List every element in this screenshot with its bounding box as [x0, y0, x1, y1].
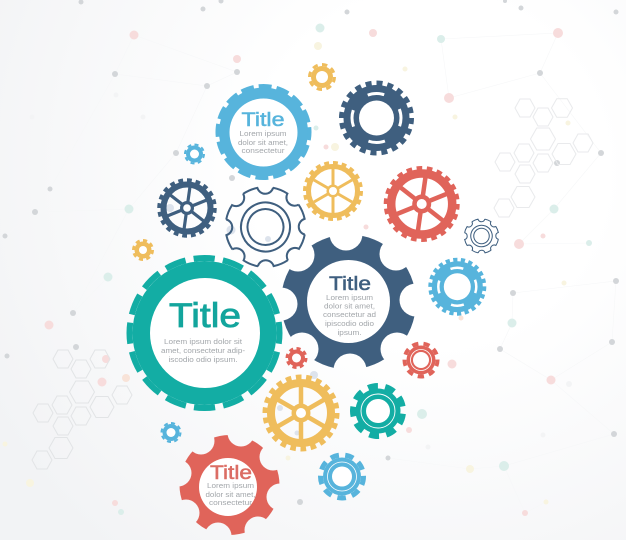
text: light blue gear body: consectetur [242, 146, 285, 155]
text: navy gear body: Lorem ipsum [326, 293, 373, 302]
text: teal gear body: Lorem ipsum dolor sit [164, 337, 242, 346]
text: navy gear body: ipsum. [338, 328, 362, 337]
gear: small red ringed [404, 344, 438, 376]
gear: small outline [457, 211, 506, 261]
hexagon cluster: left [32, 350, 132, 469]
text: light blue gear body: dolor sit amet, [238, 138, 288, 147]
text: light blue gear body: Lorem ipsum [240, 129, 286, 138]
gear: red title gear [180, 435, 280, 535]
text: teal gear body [161, 337, 246, 364]
gear: tiny blue lower [162, 423, 180, 442]
gear: navy title gear [281, 234, 416, 370]
text: teal gear body: iscodio odio ipsum. [168, 355, 238, 364]
text: red gear body [206, 481, 256, 507]
gear: navy outline [208, 170, 323, 284]
text: red gear body: dolor sit amet, [206, 490, 256, 499]
gear: teal title gear [120, 248, 289, 418]
gear: tiny blue [185, 144, 204, 164]
gear: red spoked [386, 168, 457, 240]
gear: light blue title gear [213, 81, 314, 183]
heading: light blue title: Title [242, 110, 284, 131]
text: navy gear body: dolor sit amet, [324, 302, 375, 310]
text: light blue gear body [238, 129, 288, 155]
gear: tiny yellow left [134, 240, 152, 260]
gear: yellow spoked lower [266, 378, 336, 448]
gear: navy slotted [342, 83, 412, 153]
heading: teal title: Title [169, 297, 241, 335]
text: teal gear body: amet, consectetur adip- [161, 346, 246, 355]
text: red gear body: consectetur [209, 498, 253, 507]
gear: teal ringed [350, 383, 406, 439]
gear: blue ringed [320, 455, 364, 498]
gear: navy spoked [160, 180, 214, 236]
hexagon cluster: right [494, 99, 593, 217]
gear: blue slotted [430, 260, 484, 314]
text: navy gear body: consectetur ad [323, 310, 376, 319]
text: red gear body: Lorem ipsum [207, 481, 254, 490]
gear: tiny red [287, 348, 306, 368]
heading: navy title: Title [329, 274, 371, 295]
text: navy gear body: ipiscodio odio [325, 319, 374, 328]
text: navy gear body [323, 293, 376, 337]
gear: small yellow top [310, 64, 334, 90]
heading: red title: Title [210, 463, 252, 484]
gear: yellow spoked upper [305, 163, 361, 219]
